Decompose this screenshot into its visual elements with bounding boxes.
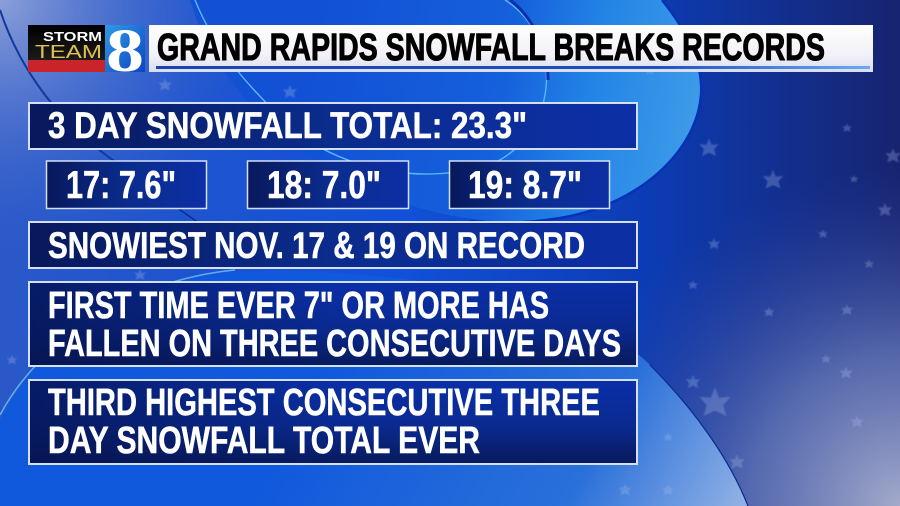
logo: Storm Team 8: TEAM xyxy=(35,42,102,62)
panel: first time ever xyxy=(29,282,637,366)
logo: Storm Team 8: STORM xyxy=(43,30,102,44)
panel: first time ever: FIRST TIME EVER 7" OR MORE HAS xyxy=(48,285,549,327)
panel: third highest: DAY SNOWFALL TOTAL EVER xyxy=(48,420,480,462)
panel: snowiest days: SNOWIEST NOV. 17 & 19 ON RECORD xyxy=(48,225,585,266)
panel: day 19: 19: 8.7" xyxy=(468,164,582,207)
logo: Storm Team 8 xyxy=(28,18,145,85)
panel: day 18: 18: 7.0" xyxy=(267,164,381,207)
panel: day 17: 17: 7.6" xyxy=(66,164,176,207)
panel: third highest xyxy=(29,380,637,464)
panel: third highest: THIRD HIGHEST CONSECUTIVE THREE xyxy=(48,382,600,424)
panel: first time ever: FALLEN ON THREE CONSECUTIVE DAYS xyxy=(48,323,621,365)
logo: Storm Team 8: 8 xyxy=(106,18,144,85)
panel: 3 day snowfall total: 3 DAY SNOWFALL TOTAL: 23.3" xyxy=(48,105,527,146)
